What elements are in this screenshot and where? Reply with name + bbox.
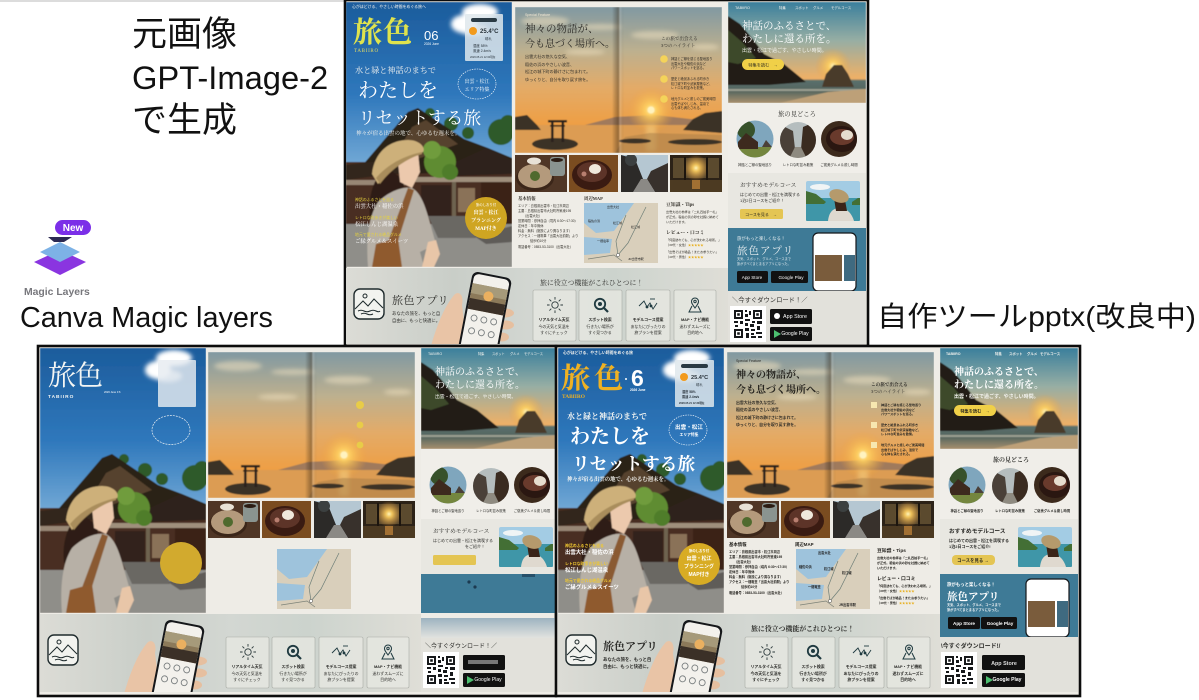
- spread panel: 稲佐の浜のやさしい波音、: [736, 407, 783, 412]
- spread panel: 出雲そばやしじみ、温泉で: [881, 447, 918, 452]
- spread panel: 出雲そばやしじみ、温泉で: [671, 101, 709, 106]
- basic info: 電話番号：0853-53-3100（出雲大社）: [729, 590, 784, 595]
- app promo strip: 旅プランを提案: [847, 677, 875, 682]
- tips and reviews: レビュー・口コミ: [877, 575, 915, 582]
- cover panel: 湿度 58%: [682, 389, 696, 394]
- right column web panel: おすすめモデルコース: [740, 182, 796, 189]
- spread panel: 3つのハイライト: [661, 43, 695, 49]
- tips and reviews: 豆知識・Tips: [877, 547, 906, 554]
- basic info: 徒歩約10分: [530, 238, 547, 243]
- cover panel: エリア特集: [464, 86, 490, 93]
- cover panel: 心がほどける、やさしい時間をめぐる旅へ: [352, 4, 426, 9]
- right column web panel: コースを見る →: [957, 557, 989, 564]
- heading: source image label: GPT-Image-2: [132, 59, 328, 96]
- right column web panel: 神話のふるさとで、: [435, 365, 525, 378]
- app promo strip: 行きたい場所が: [799, 671, 827, 676]
- heading: source image label: [132, 6, 328, 143]
- cover panel: TABIIRO: [354, 49, 379, 54]
- basic info: [729, 541, 789, 595]
- spread panel: ゆっくりと、自分を取り戻す旅を。: [736, 422, 798, 427]
- app promo strip: 旅プランを提案: [634, 330, 662, 335]
- spread panel: 地元グルメと癒しのご褒美時間: [671, 96, 716, 101]
- cover panel: リセットする旅: [358, 108, 481, 128]
- map: [795, 541, 870, 609]
- cover panel: [558, 348, 728, 613]
- cover panel: レトロな町歩きが楽しい: [565, 561, 608, 566]
- map: 松江城: [842, 570, 852, 575]
- spread panel: 出雲大社や稲佐の浜など: [881, 407, 916, 412]
- basic info: 電話番号：0853-53-3100（出雲大社）: [518, 244, 573, 249]
- map: 周辺MAP: [795, 541, 814, 548]
- tips and reviews: 豆知識・Tips: [666, 201, 694, 208]
- cover panel: 25.4°C: [480, 29, 499, 35]
- right column web panel: グルメ: [813, 5, 823, 10]
- app promo strip: 旅に役立つ機能がこれひとつに！: [540, 278, 643, 287]
- tips and reviews: （40代・男性）★★★★★: [666, 254, 703, 259]
- spread panel: レトロな町並みを散策。: [671, 85, 706, 90]
- spread panel: 歴史と絶景あふれる町歩き: [671, 76, 709, 81]
- map: 稲佐の浜: [799, 564, 813, 569]
- right column web panel: スポット: [1009, 351, 1023, 356]
- right column web panel: ご褒美グルメ＆癒し時間: [820, 162, 858, 167]
- spread panel: 松江の城下町の静けさに包まれて。: [736, 415, 798, 420]
- right column web panel: わたしに還る所を。: [954, 378, 1044, 391]
- spread panel: 出雲大社の悠久な空気、: [736, 400, 779, 405]
- cover panel: 出雲・松江: [686, 555, 712, 562]
- right column web panel: はじめての出雲・松江を満喫する: [949, 537, 1009, 543]
- app promo strip: MAP・ナビ機能: [894, 664, 922, 669]
- cover panel: 旅のしおり付: [689, 548, 710, 553]
- right column web panel: レトロな町並み散策: [995, 508, 1026, 513]
- right column web panel: TABIIRO: [735, 6, 750, 10]
- app promo strip: 自由に、もっと快適に。: [603, 663, 651, 670]
- right column web panel: 旅色アプリ: [737, 244, 794, 257]
- download panel: ＼今すぐダウンロード！／: [732, 295, 808, 304]
- tips and reviews: （30代・女性）★★★★★: [666, 242, 703, 247]
- app promo strip: 今の天気と気温を: [538, 324, 570, 329]
- map: 周辺MAP: [584, 195, 603, 202]
- map: [277, 549, 351, 609]
- right column web panel: モデルコース: [1040, 351, 1061, 356]
- app promo strip: スポット検索: [281, 664, 305, 669]
- spread panel: [727, 352, 934, 498]
- icon: Canva Magic Layers: New: [63, 223, 84, 234]
- cover panel: エリア特集: [680, 432, 699, 437]
- cover panel: 25.4°C: [691, 375, 708, 381]
- label: Canva Magic layers: Canva Magic layers: [20, 302, 273, 334]
- right column web panel: スポット: [795, 5, 809, 10]
- right column web panel: モデルコース: [831, 5, 852, 10]
- app promo strip: MAP・ナビ機能: [681, 317, 709, 322]
- spread panel: パワースポットを巡る。: [881, 411, 915, 416]
- spread panel: Special Feature: [525, 13, 550, 17]
- app promo strip: モデルコース提案: [633, 317, 664, 322]
- cover panel: 松江しんじ湖温泉: [565, 566, 609, 574]
- cover panel: プランニング: [471, 217, 501, 224]
- cover panel: 神話のふるさとを巡る: [565, 543, 604, 548]
- map: 一畑電車: [597, 238, 609, 243]
- right column web panel: 神話のふるさとで、: [742, 19, 836, 32]
- right column web panel: 旅がすべてまとまるアプリになった。: [947, 607, 1001, 612]
- cover panel: TABIIRO: [48, 394, 74, 400]
- cover panel: 旅のしおり付: [476, 202, 497, 207]
- cover panel: 松江しんじ湖温泉: [355, 220, 399, 228]
- right column web panel: 旅がもっと楽しくなる！: [947, 581, 995, 588]
- app promo strip: [558, 614, 940, 700]
- map: 松江城: [631, 224, 640, 229]
- cover panel: リセットする旅: [572, 454, 695, 474]
- app promo strip: すぐ見つかる: [281, 677, 305, 682]
- cover panel: 2026.05.21 12:30現在: [679, 401, 705, 405]
- icon: Canva Magic Layers: Magic Layers: [24, 287, 90, 298]
- cover panel: ご縁グルメ＆スイーツ: [355, 237, 408, 245]
- app promo strip: リアルタイム天気: [231, 664, 263, 669]
- app promo strip: 行きたい場所が: [586, 324, 614, 329]
- spread panel: 歴史と絶景あふれる町歩き: [881, 422, 918, 427]
- right column web panel: おすすめモデルコース: [949, 527, 1006, 535]
- download panel: App Store: [783, 314, 807, 320]
- food photos: [208, 500, 415, 538]
- cover panel: 06: [424, 28, 438, 43]
- cover panel: 出雲大社・稲佐の浜: [565, 548, 614, 556]
- right column web panel: TABIIRO: [946, 352, 961, 356]
- spread panel: 松江城下町や武家屋敷など、: [881, 427, 921, 432]
- basic info: 定休日：年中無休: [729, 569, 755, 574]
- app promo strip: 今の天気と気温を: [231, 671, 263, 676]
- spread panel: 3つのハイライト: [871, 389, 905, 395]
- right column web panel: 旅がすべてまとまるアプリになった。: [737, 261, 791, 266]
- cover panel: 2026 June 0 6: [104, 390, 121, 394]
- cover panel: 晴れ: [485, 36, 492, 41]
- map: 稲佐の浜: [588, 218, 600, 223]
- app promo strip: 旅に役立つ機能がこれひとつに！: [751, 624, 854, 633]
- download panel: \今すぐダウンロード!/: [941, 642, 1001, 650]
- right column web panel: をご紹介！: [433, 543, 485, 549]
- cover panel: 2026.05.21 12:30現在: [470, 55, 496, 59]
- app promo strip: 目的地へ: [380, 677, 396, 682]
- right column web panel: わたしに還る所を。: [742, 33, 836, 45]
- cover panel: TABIIRO: [562, 394, 585, 400]
- app promo strip: あなたにぴったりの: [630, 324, 666, 329]
- app promo strip: 迷わずスムーズに: [373, 671, 404, 676]
- app promo strip: すぐ見つかる: [588, 330, 612, 335]
- right column web panel: モデルコース: [524, 351, 543, 356]
- download panel: App Store: [991, 661, 1017, 667]
- basic info: 基本情報: [729, 541, 747, 548]
- app promo strip: [346, 268, 728, 361]
- app promo strip: 旅色アプリ: [392, 293, 449, 307]
- right column web panel: 神話とご縁の聖地巡り: [738, 162, 772, 167]
- right column web panel: 旅がもっと楽しくなる！: [737, 235, 785, 242]
- download panel: [421, 638, 556, 692]
- cover panel: 神々が宿る出雲の地で、心ゆるむ週末を。: [567, 475, 669, 483]
- map: 松江城: [613, 220, 622, 225]
- tips and reviews: が正式。稲佐の浜の砂を社殿に納めて: [877, 560, 930, 565]
- right column web panel: 神話のふるさとで、: [954, 365, 1044, 378]
- cover panel: 2026 June: [630, 388, 646, 392]
- right column web panel: 旅色アプリ: [947, 590, 999, 603]
- cover panel: 出雲・松江: [464, 78, 490, 85]
- spread panel: パワースポットを巡る。: [671, 65, 706, 70]
- right column web panel: わたしに還る所を。: [435, 379, 525, 391]
- spread panel: 地元グルメと癒しのご褒美時間: [881, 442, 924, 447]
- cover panel: わたしを: [570, 425, 650, 448]
- basic info: アクセス：一畑電車「出雲大社前駅」より: [518, 233, 578, 238]
- basic info: （出雲大社）: [523, 213, 542, 218]
- cover panel: わたしを: [358, 80, 438, 102]
- food photos: [515, 154, 722, 192]
- cover panel: 旅色: [561, 362, 623, 395]
- right column web panel: [728, 2, 866, 291]
- map: JR出雲市駅: [628, 256, 644, 261]
- tips and reviews: 「何度訪れても、心が洗われる場所。」: [877, 583, 932, 588]
- cover panel: MAP付き: [475, 225, 497, 232]
- app promo strip: 目的地へ: [900, 677, 916, 682]
- icon: Canva Magic Layers: [24, 220, 91, 298]
- tips and reviews: （30代・女性）★★★★★: [877, 588, 914, 593]
- app promo strip: リアルタイム天気: [750, 664, 782, 669]
- cover panel: [346, 2, 516, 267]
- cover panel: プランニング: [684, 563, 714, 570]
- right column web panel: [421, 348, 559, 638]
- tips and reviews: いただけます。: [877, 565, 898, 570]
- right column web panel: App Store: [953, 621, 975, 626]
- app promo strip: あなたの旅を、もっと自: [392, 310, 440, 317]
- app promo strip: 旅プランを提案: [327, 677, 355, 682]
- spread panel: 出雲大社や稲佐の浜など: [671, 61, 707, 66]
- map: 出雲大社: [818, 550, 832, 555]
- right column web panel: [940, 348, 1078, 637]
- right column web panel: 1泊2日コースをご紹介！: [740, 197, 784, 203]
- spread panel: 今も息づく場所へ。: [736, 383, 826, 396]
- tips and reviews: 「出雲そばが絶品！またお参りたい」: [877, 595, 930, 600]
- basic info: （出雲大社）: [734, 559, 753, 564]
- right column web panel: 出雲・松江で過ごす、やさしい時間。: [435, 393, 516, 400]
- spread panel: 今も息づく場所へ。: [525, 37, 615, 50]
- tips and reviews: （40代・男性）★★★★★: [877, 600, 914, 605]
- map: [584, 195, 658, 263]
- food photos: [727, 500, 934, 538]
- spread panel: 神々の物語が、: [525, 22, 598, 35]
- right column web panel: グルメ: [1027, 351, 1038, 356]
- app promo strip: MAP・ナビ機能: [374, 664, 402, 669]
- cover panel: 出雲大社・稲佐の浜: [355, 202, 404, 210]
- spread panel: 神話とご縁を感じる聖地巡り: [881, 402, 921, 407]
- app promo strip: 迷わずスムーズに: [893, 671, 924, 676]
- basic info: 定休日：年中無休: [518, 223, 544, 228]
- app promo strip: すぐにチェック: [233, 677, 261, 682]
- cover panel: 風速 2.4m/s: [473, 48, 491, 53]
- spread panel: 心も体も満たされる。: [671, 105, 703, 110]
- right column web panel: コースを見る →: [745, 211, 777, 217]
- right column web panel: 旅の見どころ: [993, 456, 1029, 464]
- right column web panel: 神話とご縁の聖地巡り: [951, 508, 983, 513]
- app promo strip: 行きたい場所が: [279, 671, 307, 676]
- cover panel: MAP付き: [688, 571, 710, 578]
- tips and reviews: 「何度訪れても、心が洗われる場所。」: [666, 237, 721, 242]
- cover panel: 水と緑と神話のまちで: [355, 65, 436, 75]
- cover panel: 神々が宿る出雲の地で、心ゆるむ週末を。: [356, 129, 460, 137]
- spread panel: 神話とご縁を感じる聖地巡り: [671, 56, 712, 61]
- app promo strip: すぐ見つかる: [801, 677, 825, 682]
- app promo strip: 旅色アプリ: [603, 639, 658, 653]
- app promo strip: あなたにぴったりの: [843, 671, 879, 676]
- cover panel: 晴れ: [696, 382, 703, 387]
- tips and reviews: が正式。稲佐の浜の砂を社殿に納めて: [666, 214, 719, 219]
- app promo strip: 迷わずスムーズに: [680, 324, 711, 329]
- cover panel: 出雲・松江: [473, 209, 499, 216]
- cover panel: 地元で愛される絶品グルメ: [355, 232, 402, 237]
- right column web panel: 特集: [995, 351, 1002, 356]
- app promo strip: モデルコース提案: [326, 664, 357, 669]
- app promo strip: あなたの旅を、もっと自: [603, 656, 651, 663]
- basic info: エリア：島根県出雲市・松江市周辺: [729, 549, 781, 554]
- right column web panel: TABIIRO: [428, 352, 442, 356]
- app promo strip: スポット検索: [801, 664, 825, 669]
- cover panel: [40, 348, 210, 613]
- tips and reviews: [877, 547, 932, 605]
- cover panel: 旅色: [48, 360, 103, 392]
- spread panel: ゆっくりと、自分を取り戻す旅を。: [525, 76, 590, 82]
- basic info: 営業時間：参拝自由（境内 6:30〜17:30）: [729, 564, 789, 569]
- cover panel: 神話のふるさとを巡る: [355, 197, 394, 202]
- app promo strip: すぐにチェック: [540, 330, 568, 335]
- panel: own tool pptx result: [556, 346, 1080, 700]
- cover panel: ご縁グルメ＆スイーツ: [565, 583, 619, 591]
- tips and reviews: いただけます。: [666, 219, 687, 224]
- app promo strip: リアルタイム天気: [538, 317, 570, 322]
- right column web panel: ご褒美グルメ＆癒し時間: [514, 508, 551, 513]
- heading: source image label: 元画像: [132, 6, 237, 57]
- right column web panel: 出雲・松江で過ごす、やさしい時間。: [742, 47, 827, 54]
- right column web panel: おすすめモデルコース: [433, 528, 489, 535]
- right column web panel: はじめての出雲・松江を満喫する: [740, 191, 800, 197]
- basic info: エリア：島根県出雲市・松江市周辺: [518, 203, 570, 208]
- right column web panel: レトロな町並み散策: [476, 508, 507, 513]
- spread panel: 松江の城下町の静けさに包まれて。: [525, 68, 590, 74]
- app promo strip: モデルコース提案: [846, 664, 877, 669]
- download panel: Google Play: [474, 677, 502, 683]
- right column web panel: レトロな町並み散策: [783, 162, 814, 167]
- spread panel: 出雲大社の悠久な空気、: [525, 53, 570, 59]
- download panel: ＼今すぐダウンロード！／: [425, 642, 497, 650]
- cover panel: 旅色: [353, 16, 412, 49]
- tips and reviews: 「出雲そばが絶品！またお参りたい」: [666, 249, 719, 254]
- right column web panel: グルメ: [510, 351, 520, 356]
- app promo strip: 目的地へ: [687, 330, 703, 335]
- right column web panel: App Store: [742, 275, 763, 280]
- right column web panel: 特集を読む →: [748, 62, 778, 68]
- right column web panel: 特集を読む →: [960, 408, 990, 414]
- right column web panel: 旅の見どころ: [778, 109, 816, 118]
- basic info: [518, 195, 578, 249]
- right column web panel: ご褒美グルメ＆癒し時間: [1034, 508, 1071, 513]
- basic info: アクセス：一畑電車「出雲大社前駅」より: [729, 579, 789, 584]
- right column web panel: 出雲・松江で過ごす、やさしい時間。: [954, 393, 1039, 400]
- app promo strip: すぐにチェック: [752, 677, 780, 682]
- right column web panel: スポット: [492, 351, 505, 356]
- basic info: 主要：島根県出雲市大社町杵築東195: [729, 554, 782, 559]
- spread panel: この旅で出会える: [661, 35, 698, 42]
- app promo strip: 自由に、もっと快適に。: [392, 317, 440, 324]
- tips and reviews: 出雲大社の参拝は「二礼四拍手一礼」: [666, 209, 719, 214]
- spread panel: 松江城下町や武家屋敷など、: [671, 81, 712, 86]
- panel: Canva Magic Layers result: [38, 346, 559, 700]
- basic info: 徒歩約10分: [741, 584, 758, 589]
- spread photo: [208, 352, 415, 498]
- basic info: 営業時間：参拝自由（境内 6:30〜17:30）: [518, 218, 578, 223]
- spread panel: 心も体も満たされる。: [881, 451, 912, 456]
- tips and reviews: レビュー・口コミ: [666, 230, 704, 236]
- cover panel: 風速 2.4m/s: [682, 394, 699, 399]
- spread panel: [515, 7, 722, 153]
- right column web panel: はじめての出雲・松江を満喫する: [433, 537, 493, 543]
- cover panel: 地元で愛される絶品グルメ: [565, 578, 612, 583]
- app promo strip: あなたにぴったりの: [323, 671, 359, 676]
- map: 松江城: [824, 566, 834, 571]
- basic info: 基本情報: [518, 195, 536, 202]
- download panel: Google Play: [993, 677, 1022, 683]
- basic info: 料金：無料（施設により異なります）: [729, 574, 783, 579]
- app promo strip: 今の天気と気温を: [750, 671, 782, 676]
- cover panel: 出雲・松江: [675, 423, 703, 431]
- right column web panel: 天気、スポット、グルメ、コースまで: [947, 602, 1001, 607]
- spread panel: Special Feature: [736, 359, 761, 363]
- map: JR出雲市駅: [839, 602, 857, 607]
- panel: source magazine page: [345, 0, 868, 361]
- tips and reviews: [666, 201, 721, 259]
- basic info: 料金：無料（施設により異なります）: [518, 228, 572, 233]
- right column web panel: 特集: [478, 351, 485, 356]
- right column web panel: 神話とご縁の聖地巡り: [432, 508, 464, 513]
- tips and reviews: 出雲大社の参拝は「二礼四拍手一礼」: [877, 555, 930, 560]
- spread panel: 稲佐の浜のやさしい波音、: [525, 61, 574, 67]
- download panel: [940, 637, 1078, 692]
- right column web panel: 1泊2日コースをご紹介!: [949, 543, 991, 549]
- label: own tool pptx: 自作ツールpptx(改良中): [877, 301, 1196, 332]
- map: 出雲大社: [607, 204, 619, 209]
- download panel: [728, 291, 866, 344]
- basic info: 主要：島根県出雲市大社町杵築東195: [518, 208, 571, 213]
- cover panel: 湿度 58%: [473, 43, 488, 48]
- right column web panel: Google Play: [987, 621, 1014, 626]
- cover panel: レトロな町歩きが楽しい: [355, 215, 398, 220]
- heading: source image label: で生成: [132, 92, 237, 143]
- cover panel: 2026 June: [424, 42, 439, 46]
- right column web panel: 天気、スポット、グルメ、コースまで: [737, 256, 791, 261]
- right column web panel: Google Play: [778, 275, 804, 280]
- app promo strip: スポット検索: [588, 317, 612, 322]
- map: 一畑電車: [808, 584, 822, 589]
- app promo strip: [40, 614, 421, 700]
- right column web panel: 特集: [779, 5, 786, 10]
- spread panel: この旅で出会える: [871, 381, 908, 388]
- cover panel: 水と緑と神話のまちで: [567, 411, 647, 421]
- cover panel: 心がほどける、やさしい時間をめぐる旅: [563, 350, 633, 355]
- cover panel: 6: [631, 365, 644, 391]
- download panel: Google Play: [781, 331, 809, 337]
- spread panel: 神々の物語が、: [736, 368, 806, 381]
- spread panel: レトロな町並みを散策。: [881, 431, 915, 436]
